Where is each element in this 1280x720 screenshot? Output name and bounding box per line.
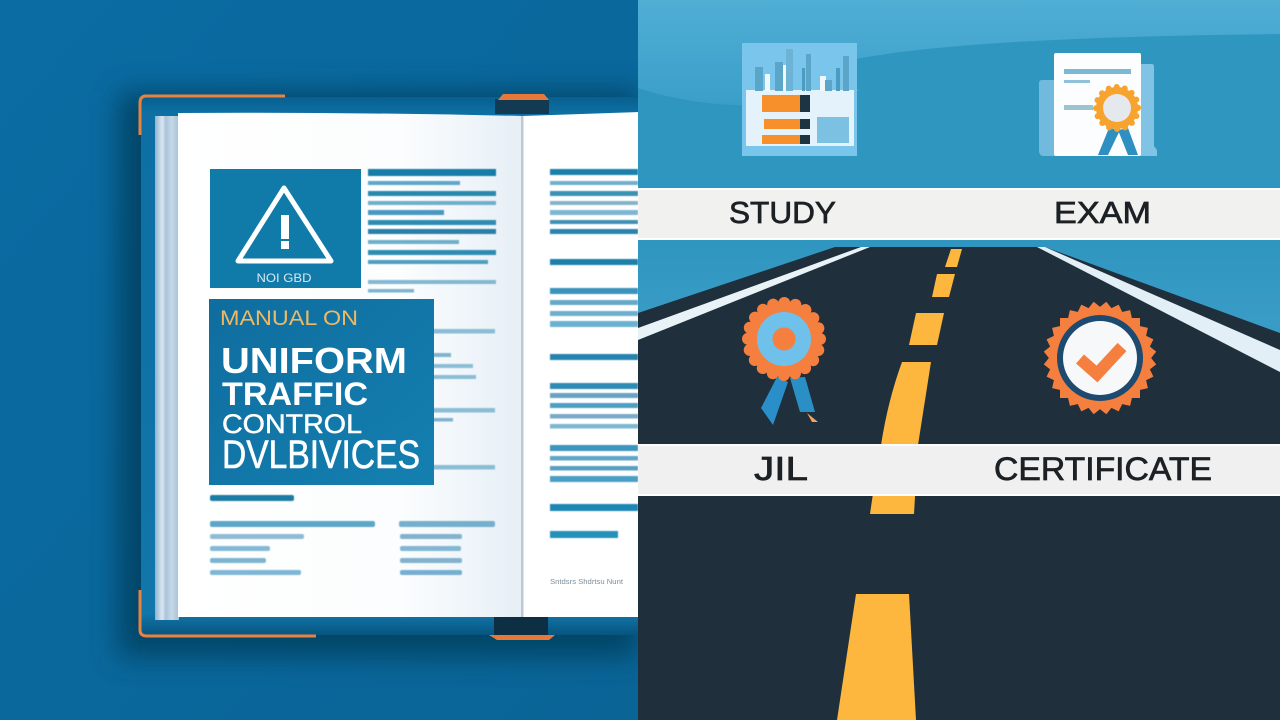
left page <box>178 113 522 617</box>
spine fold <box>521 116 524 617</box>
label: certificate: CERTIFICATE <box>994 451 1212 487</box>
orange bars <box>762 95 810 144</box>
icon: medal rosette <box>748 303 820 425</box>
warning panel <box>210 169 361 288</box>
right road edge line <box>1037 247 1280 372</box>
label band: study and exam <box>638 188 1280 240</box>
paper <box>1054 53 1141 156</box>
open book <box>118 92 638 657</box>
label: JIL: JIL <box>754 450 808 487</box>
book cover <box>141 97 638 635</box>
seal <box>1096 87 1138 129</box>
top spine tab <box>495 94 549 114</box>
icon: study chart <box>742 43 857 156</box>
paper lines <box>1064 69 1131 110</box>
back folder <box>1039 80 1060 156</box>
badge ring <box>1057 315 1143 401</box>
cover orange trim <box>140 96 316 636</box>
ribbons <box>761 377 818 425</box>
label band: JIL and certificate <box>638 444 1280 496</box>
title kicker: MANUAL ON <box>220 307 358 330</box>
bottom text lines on left page <box>210 495 495 575</box>
sky below the band <box>638 240 1280 380</box>
centre dashes <box>837 249 962 720</box>
light upper sky wedge <box>638 0 1280 106</box>
title line 4: DVLBIVICES <box>222 433 420 477</box>
label: study: STUDY <box>729 195 836 230</box>
title line 2: TRAFFIC <box>222 376 368 412</box>
bottom spine tab <box>489 616 555 640</box>
check mark <box>1080 347 1122 374</box>
ribbons <box>1098 128 1138 155</box>
title line 3: CONTROL <box>222 409 362 439</box>
skyline chart <box>755 49 849 91</box>
warning caption: NOI GBD <box>256 273 312 285</box>
title panel <box>209 299 434 485</box>
icon: certified check badge <box>1044 302 1156 414</box>
icon: warning triangle <box>238 188 331 261</box>
right page <box>522 112 638 617</box>
left background <box>0 0 638 720</box>
right background: sky <box>638 0 1280 720</box>
left road edge line <box>638 247 870 340</box>
road surface <box>638 247 1280 720</box>
small footer text: Sntdsrs Shdrtsu Nunt <box>550 577 624 586</box>
side panel <box>817 117 849 143</box>
text lines beside warning panel <box>368 169 496 470</box>
badge teeth <box>1044 302 1156 414</box>
icon: exam certificate <box>1039 53 1157 156</box>
road <box>638 247 1280 720</box>
label: exam: EXAM <box>1054 195 1151 230</box>
book shadow <box>118 92 638 657</box>
page stack <box>155 116 179 620</box>
rosette <box>748 303 820 375</box>
title line 1: UNIFORM <box>221 340 407 381</box>
text lines on right page <box>550 169 638 538</box>
